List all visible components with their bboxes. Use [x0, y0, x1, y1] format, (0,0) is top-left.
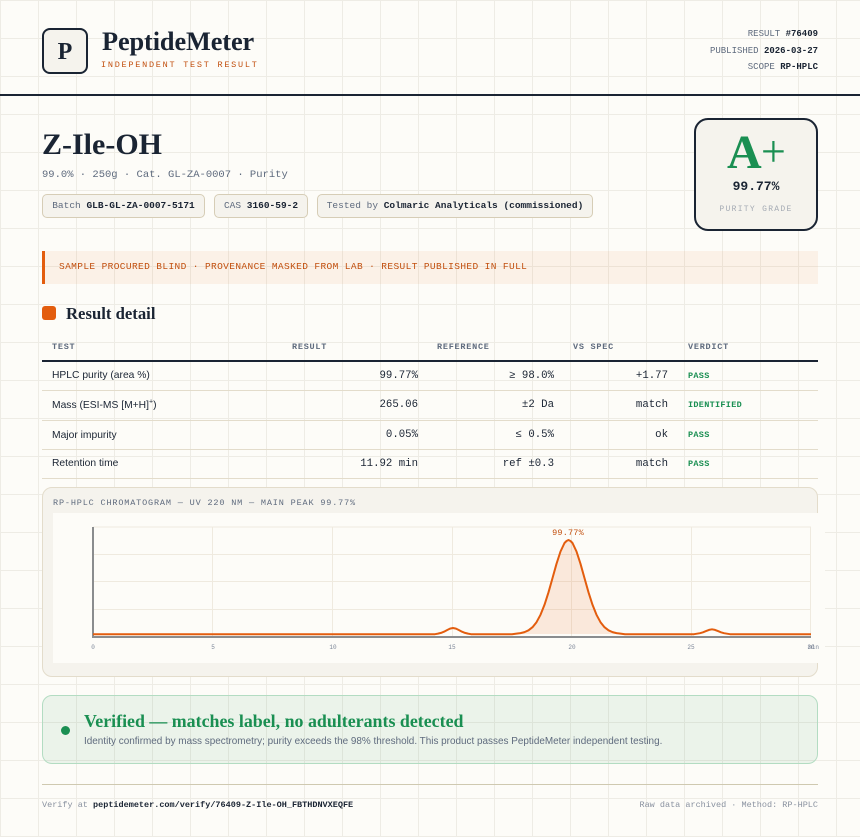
row: HPLC purity [52, 370, 710, 382]
chromatogram title: RP-HPLC CHROMATOGRAM — UV 220 NM — MAIN PEAK 99.77% [53, 498, 356, 508]
axes [93, 527, 811, 637]
section marker [42, 306, 56, 320]
chip: batch: Batch GLB-GL-ZA-0007-5171 [52, 200, 195, 211]
grade letter: A [727, 126, 762, 179]
report metadata: PUBLISHED 2026-03-27 [710, 46, 818, 56]
row: major impurity: ≤ 0.5% [516, 429, 554, 441]
row: mass: 265.06 [380, 399, 418, 411]
results table: VERDICT [688, 342, 729, 352]
logo mark: P [58, 39, 72, 65]
callout heading: Verified — matches label, no adulterants detected [84, 711, 463, 731]
row: HPLC purity: 99.77% [380, 370, 418, 382]
brand name: PeptideMeter [102, 27, 254, 56]
x axis labels: 25 [687, 644, 695, 651]
grade plus: + [761, 127, 786, 176]
row: mass: match [636, 399, 668, 411]
row: major impurity [52, 429, 710, 441]
panel: chromatogram [42, 487, 818, 677]
purity score: 99.77% [733, 179, 779, 194]
results table [42, 342, 818, 479]
x axis labels: min [808, 644, 819, 651]
notice banner: SAMPLE PROCURED BLIND · PROVENANCE MASKED FROM LAB · RESULT PUBLISHED IN FULL [59, 261, 527, 272]
row: retention time: PASS [688, 459, 710, 469]
header rule [0, 94, 860, 96]
x axis labels: 5 [211, 644, 215, 651]
row: HPLC purity: HPLC purity (area %) [52, 370, 150, 381]
row: mass [52, 399, 742, 411]
results table: VS SPEC [573, 342, 614, 352]
report metadata [710, 29, 818, 72]
chip: batch [42, 194, 205, 218]
trace [93, 540, 811, 634]
row: retention time: 11.92 min [360, 458, 418, 470]
section heading: Result detail [66, 304, 155, 323]
results table: REFERENCE [437, 342, 490, 352]
row: HPLC purity: +1.77 [636, 370, 668, 382]
row: major impurity: 0.05% [386, 429, 418, 441]
footer verify link: Verify at peptidemeter.com/verify/76409-Z-Ile-OH_FBTHDNVXEQFE [42, 800, 353, 810]
row: retention time: Retention time [52, 458, 118, 469]
row: retention time: ref ±0.3 [503, 458, 554, 470]
results table: TEST [52, 342, 75, 352]
grade card [694, 118, 818, 231]
callout text: Identity confirmed by mass spectrometry; purity exceeds the 98% threshold. This product passes PeptideMeter independent testing. [84, 736, 662, 747]
footer method note: Raw data archived · Method: RP-HPLC [639, 800, 818, 810]
verified callout [42, 695, 818, 764]
x axis labels: 0 [91, 644, 95, 651]
chip: tested by: Tested by Colmaric Analyticals (commissioned) [327, 200, 583, 211]
footer rule [42, 784, 818, 785]
row: mass: ±2 Da [522, 399, 554, 411]
row: mass: IDENTIFIED [688, 400, 742, 410]
results table: RESULT [292, 342, 327, 352]
chip: CAS: CAS 3160-59-2 [224, 200, 298, 211]
brand tagline: INDEPENDENT TEST RESULT [101, 60, 259, 70]
notice banner [42, 251, 818, 284]
product subtitle: 99.0% · 250g · Cat. GL-ZA-0007 · Purity [42, 169, 288, 181]
row: retention time: match [636, 458, 668, 470]
x axis labels: 15 [448, 644, 456, 651]
x axis labels: 20 [568, 644, 576, 651]
row: HPLC purity: ≥ 98.0% [509, 370, 554, 382]
product title: Z-Ile-OH [42, 128, 162, 161]
row: major impurity: PASS [688, 430, 710, 440]
row: major impurity: ok [655, 429, 668, 441]
row: HPLC purity: PASS [688, 371, 710, 381]
x axis labels: 10 [329, 644, 337, 651]
grade caption: PURITY GRADE [719, 205, 793, 214]
x axis labels: 30 [807, 644, 815, 651]
row: major impurity: Major impurity [52, 430, 117, 441]
report metadata: RESULT #76409 [748, 29, 818, 39]
row: retention time [52, 458, 710, 470]
logo mark [42, 28, 88, 74]
status dot [61, 726, 70, 735]
chip: tested by [317, 194, 593, 218]
peak area [512, 540, 625, 634]
chip: CAS [214, 194, 308, 218]
peak label: 99.77% [552, 528, 585, 538]
report metadata: SCOPE RP-HPLC [748, 62, 818, 72]
chart: chromatogram [53, 513, 825, 663]
row: mass: Mass (ESI-MS [M+H]+) [52, 399, 157, 411]
x axis labels [91, 644, 819, 651]
